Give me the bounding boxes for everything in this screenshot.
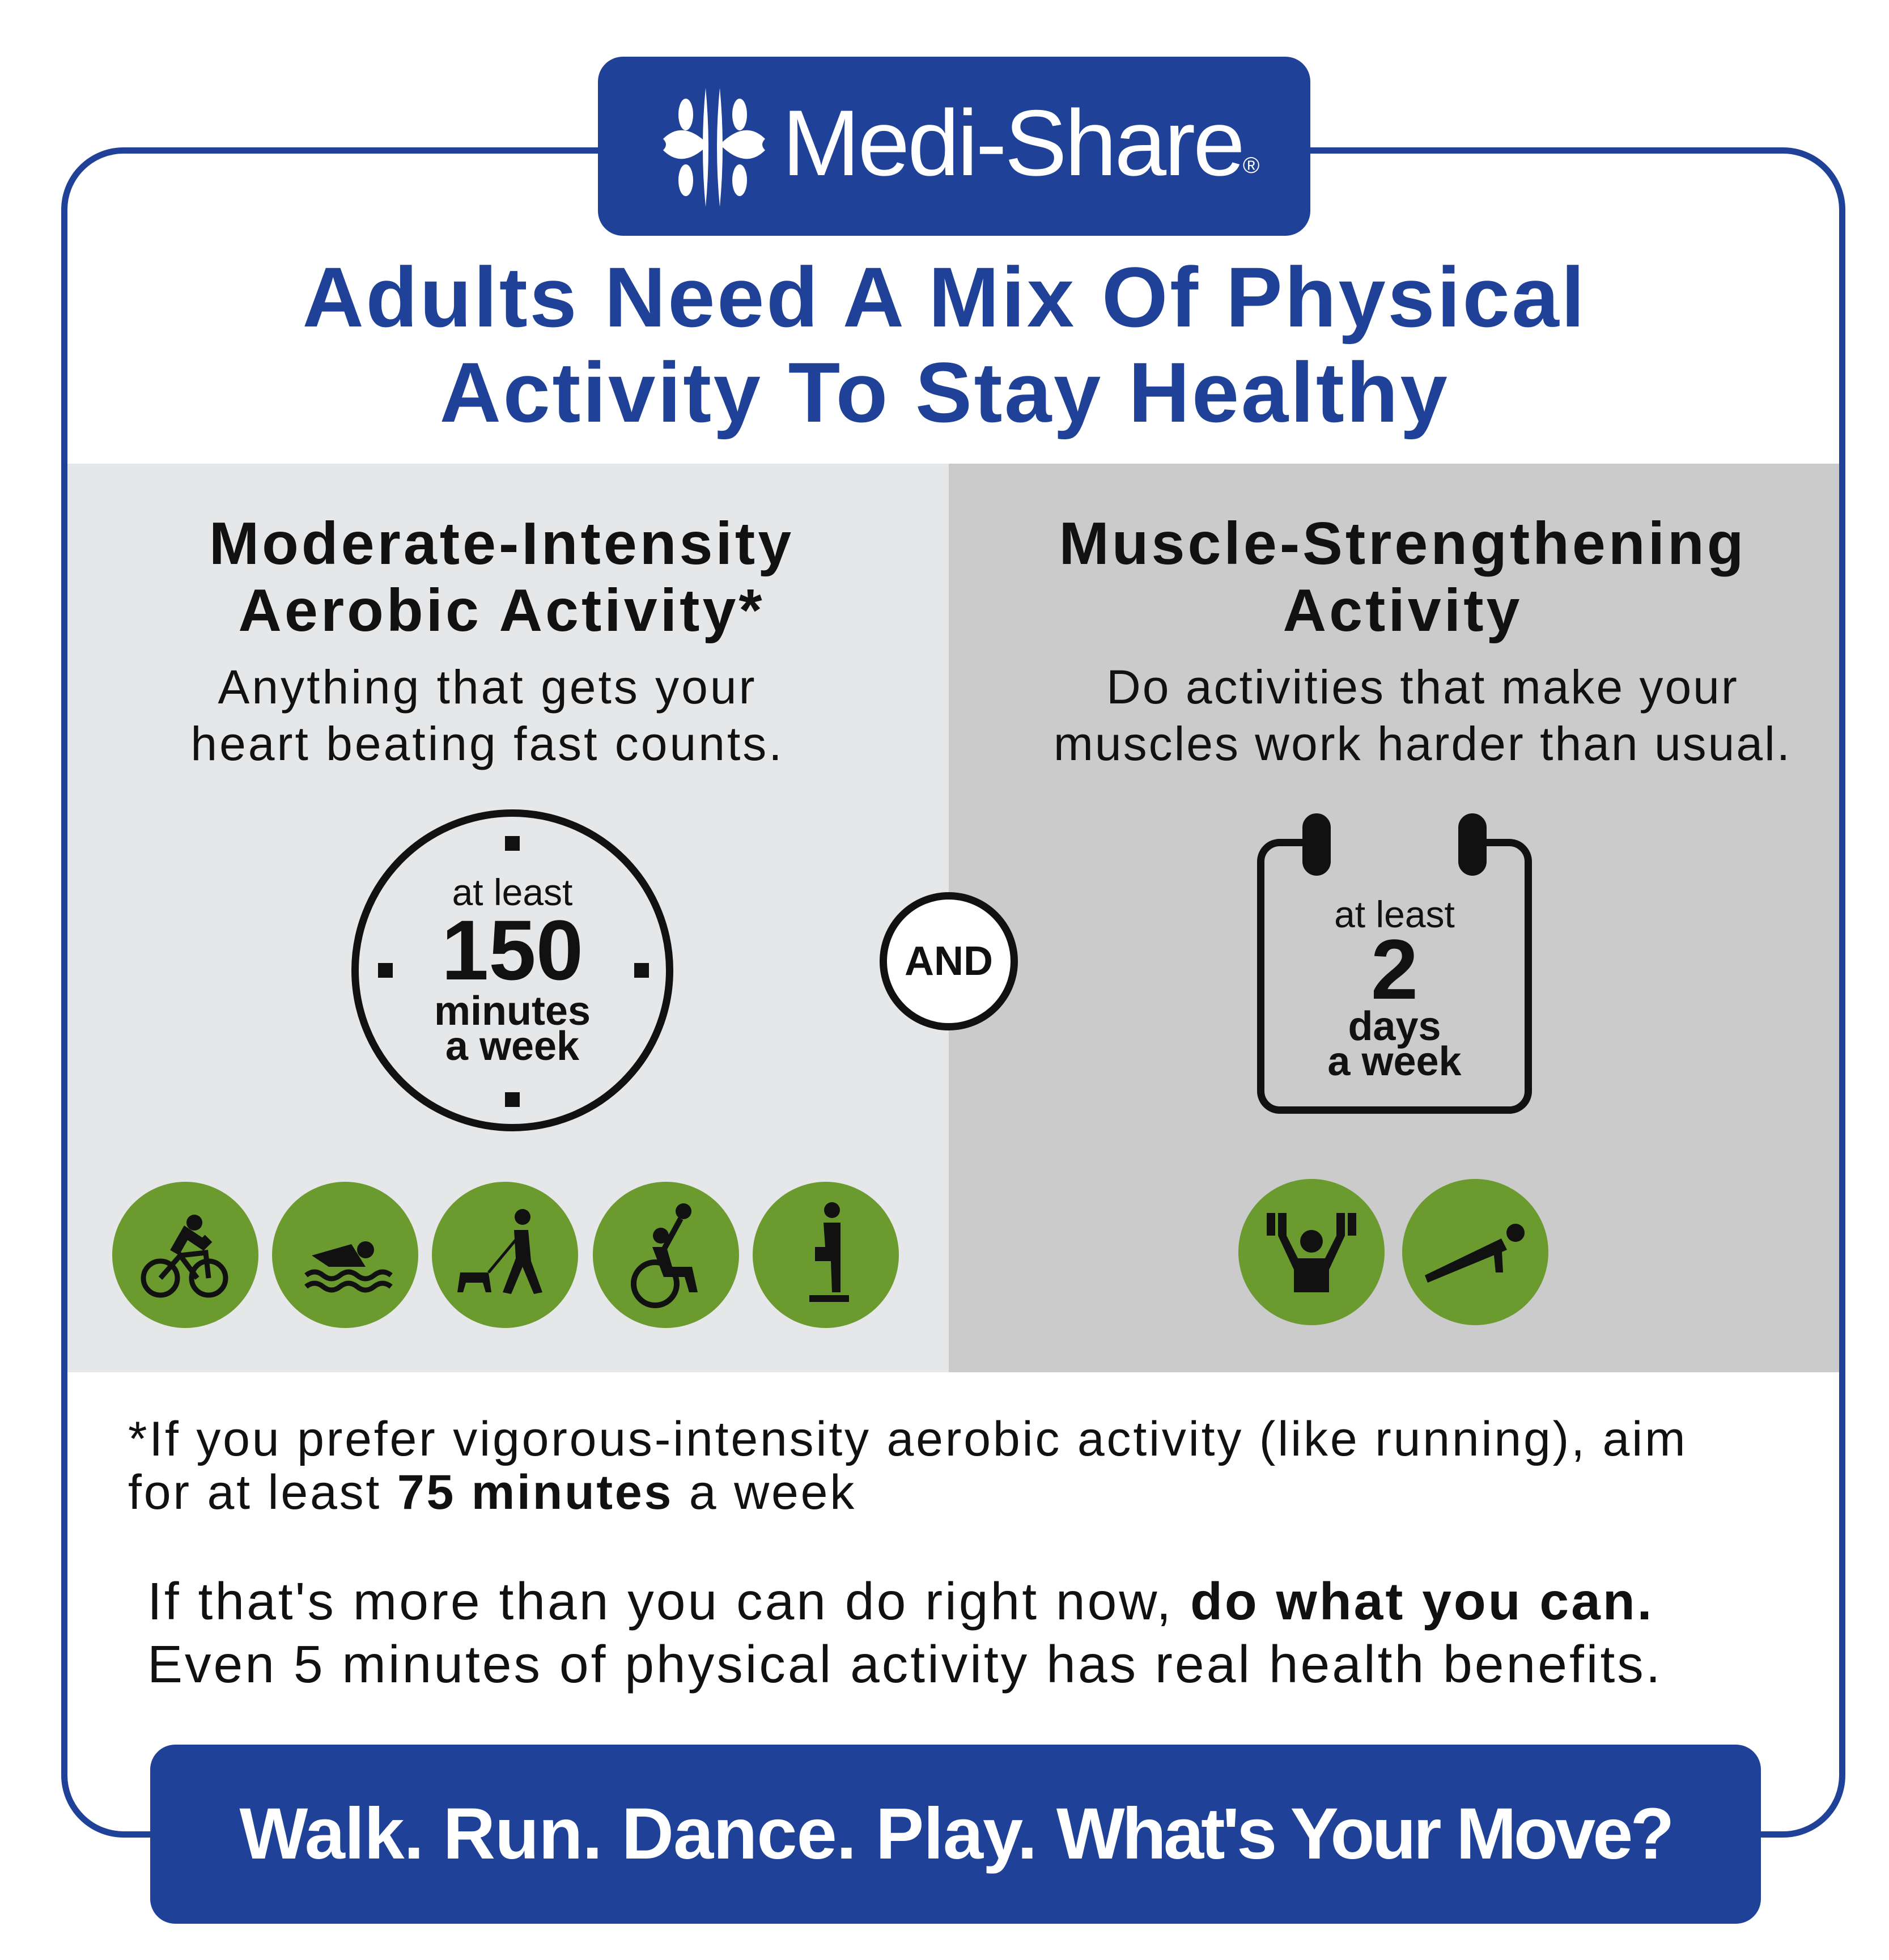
encouragement text: Even 5 minutes of physical activity has real health benefits. (147, 1635, 1663, 1694)
icon: dog walking (432, 1182, 578, 1328)
clock: 150 minutes: a week (445, 1024, 579, 1069)
left panel background (67, 464, 949, 1372)
title (303, 249, 1586, 440)
right panel background (949, 464, 1839, 1372)
right subtext: muscles work harder than usual. (1054, 717, 1792, 770)
left subtext: heart beating fast counts. (190, 717, 784, 770)
logo box (598, 57, 1310, 236)
footnote: for at least 75 minutes a week (128, 1465, 856, 1520)
right heading: Muscle-Strengthening (1059, 510, 1747, 577)
logo wordmark: Medi-Share® (782, 91, 1257, 195)
calendar: 2 days: days (1348, 1004, 1441, 1049)
left heading: Aerobic Activity* (238, 577, 765, 644)
encouragement text: If that's more than you can do right now, do what you can. (147, 1572, 1654, 1631)
left subtext: Anything that gets your (218, 660, 757, 714)
encouragement text (147, 1572, 1663, 1694)
icon: push-up (1402, 1179, 1548, 1325)
right subtext: Do activities that make your (1106, 660, 1739, 714)
calendar: 2 days: a week (1327, 1039, 1462, 1084)
right subtext (1054, 660, 1792, 770)
left subtext (190, 660, 784, 770)
left heading: Moderate-Intensity (209, 510, 794, 577)
calendar: 2 days (1257, 813, 1532, 1114)
calendar: 2 days: at least (1334, 893, 1455, 935)
icon: cycling (112, 1182, 258, 1328)
bottom banner: Walk. Run. Dance. Play. What's Your Move? (239, 1793, 1672, 1874)
title: Activity To Stay Healthy (440, 345, 1449, 440)
icon: weightlifting (1238, 1179, 1385, 1325)
right heading (1059, 510, 1747, 644)
calendar: 2 days: 2 (1371, 922, 1418, 1017)
clock: 150 minutes: minutes (434, 989, 591, 1034)
icon: swimming (272, 1182, 418, 1328)
bottom banner (150, 1745, 1761, 1924)
clock: 150 minutes: at least (452, 871, 572, 913)
footnote (128, 1412, 1687, 1520)
left heading (209, 510, 794, 644)
AND circle: AND (905, 939, 993, 984)
icon: step exercise (753, 1182, 899, 1328)
title: Adults Need A Mix Of Physical (303, 249, 1586, 345)
AND circle (880, 892, 1018, 1030)
footnote: *If you prefer vigorous-intensity aerobic activity (like running), aim (128, 1412, 1687, 1466)
clock: 150 minutes (351, 809, 673, 1131)
clock: 150 minutes: 150 (442, 902, 583, 998)
right heading: Activity (1283, 577, 1522, 644)
icon: wheelchair (593, 1182, 739, 1328)
icon: logo cross (663, 88, 765, 206)
